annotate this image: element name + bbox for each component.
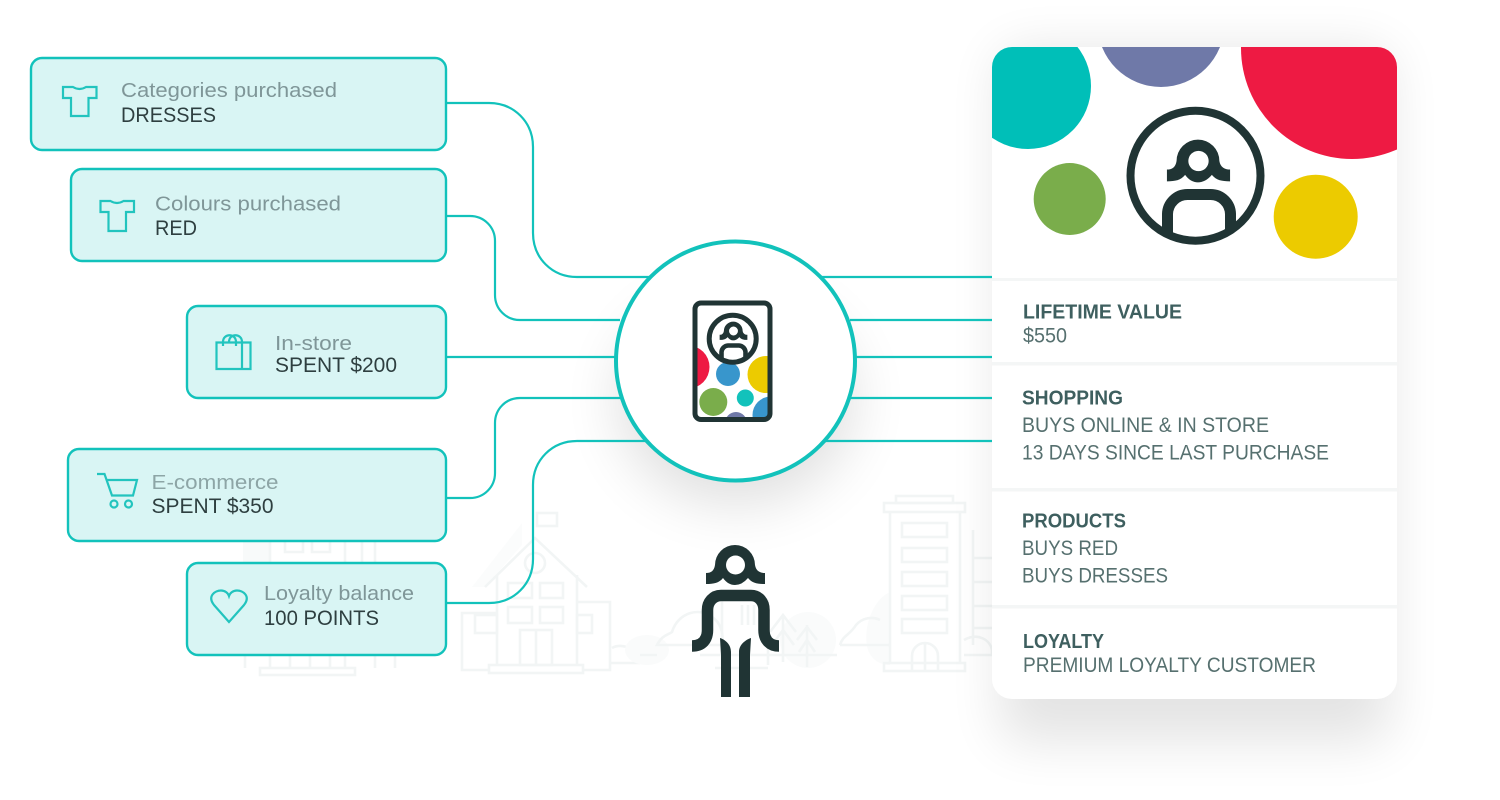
icon: t-shirt xyxy=(63,87,96,116)
section: lifetime value xyxy=(1023,300,1182,348)
dividers xyxy=(992,278,1397,608)
header: coloured circles xyxy=(992,47,1397,259)
icon: shopping cart xyxy=(97,474,137,508)
icon: mini profile card xyxy=(692,300,772,422)
section: products xyxy=(1022,510,1168,588)
section: shopping xyxy=(1022,386,1329,464)
shadow: profile card xyxy=(1000,50,1390,742)
section: loyalty: PREMIUM LOYALTY CUSTOMER xyxy=(1023,654,1316,677)
connectors: centre to profile card xyxy=(820,277,995,441)
section: shopping: SHOPPING xyxy=(1022,386,1123,410)
building: house xyxy=(462,513,639,673)
value: 100 points: 100 POINTS xyxy=(264,606,379,630)
value: red: RED xyxy=(155,216,197,240)
section: products: PRODUCTS xyxy=(1022,510,1126,532)
section: loyalty: LOYALTY xyxy=(1023,630,1104,653)
card: in-store xyxy=(187,306,446,398)
value: spent $350: SPENT $350 xyxy=(152,494,274,518)
central circle with profile card icon xyxy=(616,242,855,480)
card: categories purchased xyxy=(31,58,446,150)
card: loyalty balance xyxy=(187,563,446,655)
label: loyalty balance: Loyalty balance xyxy=(264,582,414,605)
icon: person figure xyxy=(692,545,779,697)
card: colours purchased xyxy=(71,169,446,261)
icon: t-shirt xyxy=(100,201,134,231)
icon: customer avatar xyxy=(1130,111,1260,241)
shadow: central circle xyxy=(618,295,854,505)
section: products: BUYS DRESSES xyxy=(1022,564,1168,588)
icon: heart xyxy=(211,590,247,622)
label: in-store: In-store xyxy=(275,332,352,355)
building: left apartment block xyxy=(243,530,395,675)
label: categories purchased: Categories purchased xyxy=(121,79,337,102)
label: e-commerce: E-commerce xyxy=(152,471,278,494)
section: shopping: 13 DAYS SINCE LAST PURCHASE xyxy=(1022,442,1329,464)
background: city skyline xyxy=(243,496,992,675)
section: lifetime value: $550 xyxy=(1023,324,1067,348)
panel: customer profile card xyxy=(992,47,1397,699)
section: loyalty xyxy=(1023,630,1316,677)
building: tower xyxy=(840,496,992,671)
card: e-commerce xyxy=(68,449,446,541)
section: products: BUYS RED xyxy=(1022,537,1118,560)
section: shopping: BUYS ONLINE & IN STORE xyxy=(1022,414,1269,437)
value: dresses: DRESSES xyxy=(121,103,216,127)
icon: shopping bag xyxy=(216,335,250,369)
section: lifetime value: LIFETIME VALUE xyxy=(1023,300,1182,324)
value: spent $200: SPENT $200 xyxy=(275,353,397,377)
connectors: left data sources to centre xyxy=(446,103,650,603)
cloud and trees behind person xyxy=(625,600,837,668)
label: colours purchased: Colours purchased xyxy=(155,192,341,216)
